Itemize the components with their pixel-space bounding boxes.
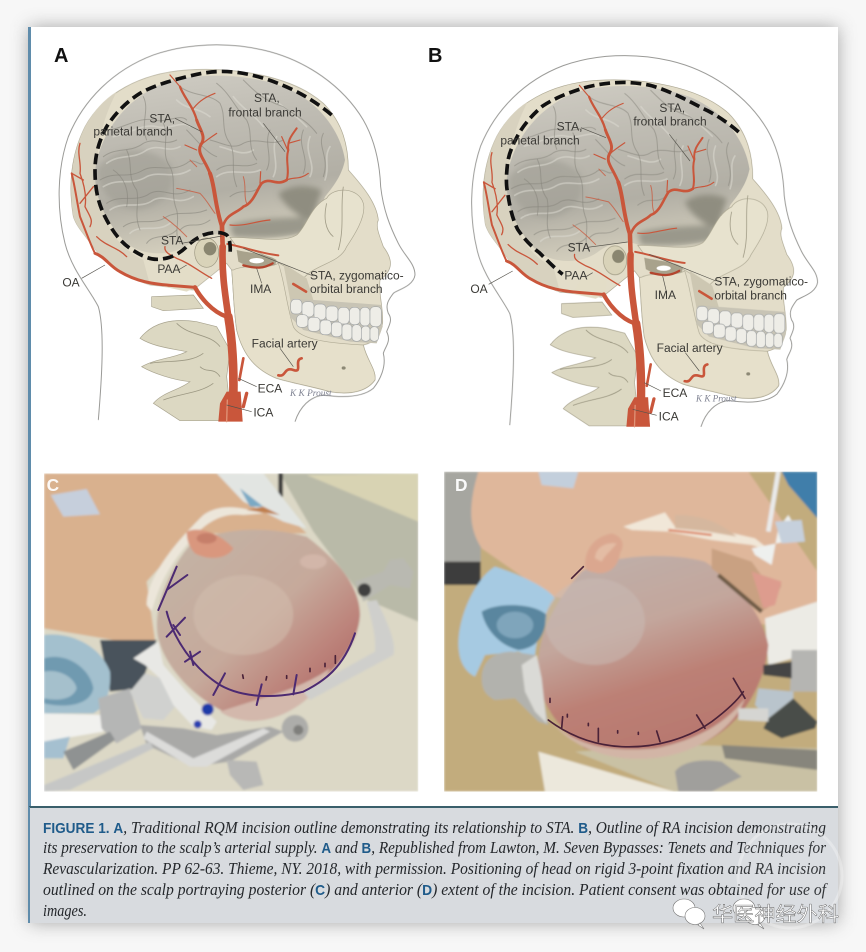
labels B xyxy=(470,101,808,423)
labels A: parietal branch xyxy=(93,124,173,138)
photo C: head in fixation, posterior incision xyxy=(44,473,418,792)
panel letter B: B xyxy=(428,45,442,67)
icon: wechat logo xyxy=(673,899,705,929)
panel A: arterial illustration with traditional incision xyxy=(59,45,415,422)
labels B: ECA xyxy=(663,386,687,400)
incision outline A xyxy=(95,71,332,259)
caption text: FIGURE 1. A, Traditional RQM incision outline demonstrating its relationship to STA. B, Outline of RA incision demonstrating xyxy=(43,818,826,837)
labels A: PAA xyxy=(157,262,180,276)
labels B: STA, xyxy=(557,120,582,134)
labels B: frontal branch xyxy=(633,114,707,128)
labels A: STA, xyxy=(254,91,280,105)
labels B: OA xyxy=(470,282,488,296)
labels B: IMA xyxy=(655,288,676,302)
photo D: head in fixation, anterior incision xyxy=(444,472,817,792)
panel letter C: C xyxy=(47,475,60,495)
caption text: images. xyxy=(43,901,87,920)
incision markings C xyxy=(158,567,355,705)
caption text: outlined on the scalp portraying posterior (C) and anterior (D) extent of the incision. Patient consent was obtained for use of xyxy=(43,880,828,899)
panel B: arterial illustration with RA incision xyxy=(470,56,818,427)
labels B: orbital branch xyxy=(714,289,787,303)
watermark text: 华医神经外科 xyxy=(712,903,839,926)
labels B: STA, zygomatico- xyxy=(714,275,808,289)
labels B: Facial artery xyxy=(657,341,723,355)
labels A: STA xyxy=(161,234,183,248)
incision markings D xyxy=(548,567,745,747)
icon: wechat logo overlay xyxy=(733,899,765,929)
left accent border xyxy=(28,27,31,807)
watermark xyxy=(673,824,842,929)
incision outline B xyxy=(506,82,739,274)
leader lines B xyxy=(489,128,716,415)
labels A: frontal branch xyxy=(228,105,302,119)
labels A: STA, zygomatico- xyxy=(310,268,404,282)
labels A xyxy=(62,91,404,419)
caption text xyxy=(42,818,828,920)
labels B: parietal branch xyxy=(500,134,580,148)
caption band xyxy=(28,806,838,923)
labels A: orbital branch xyxy=(310,282,383,296)
labels A: STA, xyxy=(149,111,175,125)
labels A: ECA xyxy=(258,382,282,396)
labels A: Facial artery xyxy=(252,336,318,350)
labels B: STA xyxy=(568,240,590,254)
panel letter D: D xyxy=(455,475,468,495)
labels B: ICA xyxy=(659,409,679,423)
panel letter A: A xyxy=(54,45,68,67)
leader lines A xyxy=(82,118,313,412)
labels A: IMA xyxy=(250,282,271,296)
labels B: STA, xyxy=(659,101,685,115)
labels A: ICA xyxy=(253,405,273,419)
labels A: OA xyxy=(62,275,80,289)
labels B: PAA xyxy=(564,269,587,283)
caption text: its preservation to the scalp’s arterial supply. A and B, Republished from Lawton, M. Seven Bypasses: Tenets and Techniques for xyxy=(43,838,826,857)
